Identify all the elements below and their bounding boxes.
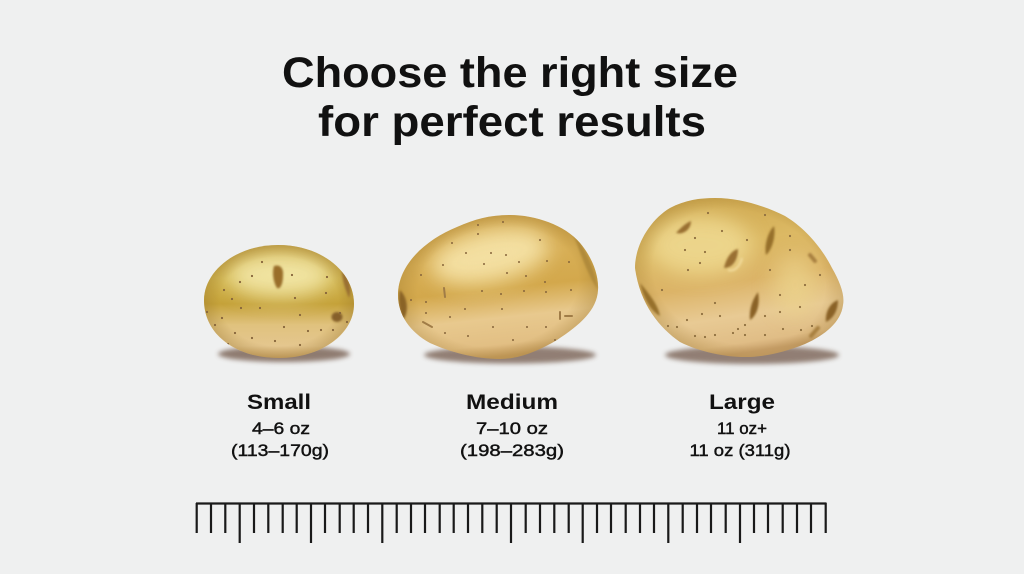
ruler: [196, 503, 826, 543]
label: large: 11 oz (311g): [690, 441, 790, 460]
potato: medium: [398, 215, 598, 367]
label: small: Small: [247, 391, 311, 414]
title: [282, 49, 738, 146]
label: medium: (198–283g): [460, 441, 564, 460]
label: large: [690, 391, 790, 460]
title: for perfect results: [318, 98, 706, 146]
label: small: (113–170g): [231, 441, 329, 460]
label: small: 4–6 oz: [252, 419, 310, 438]
potato: small: [200, 243, 358, 362]
label: small: [231, 391, 329, 460]
label: large: 11 oz+: [717, 419, 767, 438]
potato: large: [635, 198, 844, 368]
label: medium: [460, 391, 564, 460]
label: medium: 7–10 oz: [476, 419, 548, 438]
label: medium: Medium: [466, 391, 558, 414]
title: Choose the right size: [282, 49, 738, 97]
label: large: Large: [709, 391, 775, 414]
